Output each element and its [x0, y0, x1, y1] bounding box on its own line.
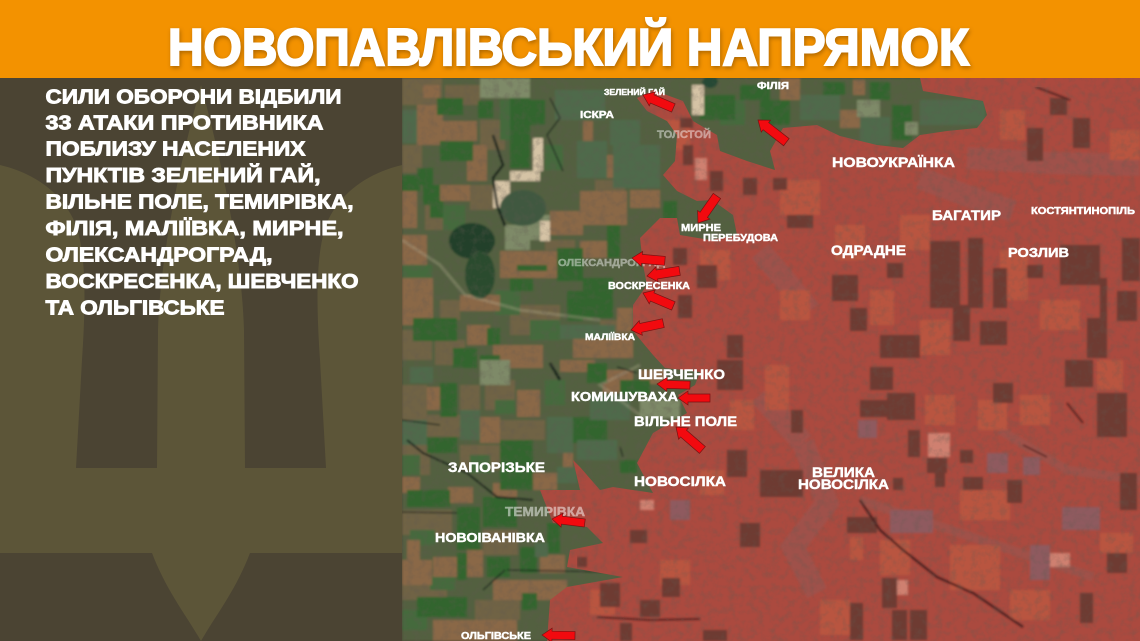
text block: attacks summary: ОЛЕКСАНДРОГРАД, [46, 244, 272, 266]
place labels: КОСТЯНТИНОПІЛЬ [1031, 206, 1135, 217]
text block: attacks summary: 33 АТАКИ ПРОТИВНИКА [46, 112, 324, 134]
map grain [402, 78, 1140, 641]
text block: attacks summary: СИЛИ ОБОРОНИ ВІДБИЛИ [46, 86, 342, 108]
place labels: ВОСКРЕСЕНКА [608, 280, 690, 292]
panel: satellite map [402, 78, 1140, 641]
text block: attacks summary: ПОБЛИЗУ НАСЕЛЕНИХ [46, 138, 306, 160]
place labels: ФІЛІЯ [757, 81, 789, 92]
icon: trident emblem [0, 85, 402, 641]
place labels: ТЕМИРІВКА [505, 504, 586, 519]
title: НОВОПАВЛІВСЬКИЙ НАПРЯМОК [168, 18, 969, 77]
place labels: РОЗЛИВ [1008, 245, 1069, 260]
text block: attacks summary [46, 86, 359, 320]
map: occupied territory overlay [540, 78, 1140, 641]
place labels: ЗЕЛЕНИЙ ГАЙ [604, 88, 665, 97]
place labels: ЗАПОРІЗЬКЕ [448, 460, 545, 475]
panel: left summary with trident [0, 78, 402, 641]
header banner [0, 0, 1140, 78]
text block: attacks summary: ВОСКРЕСЕНКА, ШЕВЧЕНКО [46, 270, 359, 293]
place labels: БАГАТИР [932, 207, 1001, 223]
place labels: НОВОІВАНІВКА [435, 530, 546, 545]
place labels: ВІЛЬНЕ ПОЛЕ [634, 413, 737, 429]
place labels: НОВОУКРАЇНКА [832, 154, 955, 170]
place labels: ПЕРЕБУДОВА [703, 233, 778, 244]
place labels: НОВОСІЛКА [634, 473, 726, 489]
place labels: КОМИШУВАХА [571, 389, 679, 404]
place labels: НОВОСІЛКА [798, 476, 889, 492]
faint village bands [760, 158, 1140, 593]
place labels: МАЛІЇВКА [585, 332, 635, 343]
text block: attacks summary: ФІЛІЯ, МАЛІЇВКА, МИРНЕ, [46, 217, 344, 240]
map: farmland base [402, 76, 1140, 641]
text block: attacks summary: ВІЛЬНЕ ПОЛЕ, ТЕМИРІВКА, [46, 190, 354, 214]
place labels: ТОЛСТОЙ [657, 128, 711, 141]
attack arrows [542, 88, 791, 641]
place labels: ВЕЛИКА [812, 464, 875, 480]
place labels: ОДРАДНЕ [831, 242, 906, 258]
place labels: ІСКРА [580, 109, 614, 121]
place labels [435, 81, 1135, 641]
text block: attacks summary: ТА ОЛЬГІВСЬКЕ [46, 296, 224, 320]
place labels: ОЛЕКСАНДРОГРАД [558, 257, 666, 269]
place labels: ШЕВЧЕНКО [638, 366, 725, 382]
place labels: МИРНЕ [681, 222, 721, 234]
text block: attacks summary: ПУНКТІВ ЗЕЛЕНИЙ ГАЙ, [46, 163, 320, 187]
